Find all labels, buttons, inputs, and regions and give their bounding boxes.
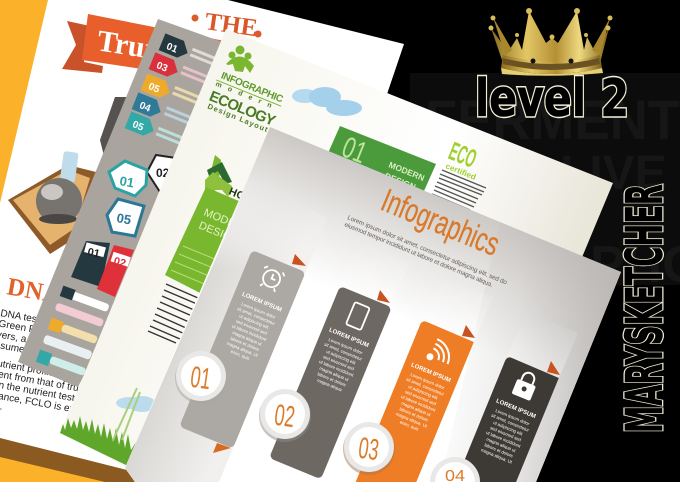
card text: magna aliqua ut (486, 437, 517, 453)
panel: modern design green: DESIGN (197, 220, 241, 247)
sheet 2: grey badges: 04 (138, 100, 152, 115)
faint background words: LIVE (560, 147, 667, 200)
light streak above card 3 (422, 276, 493, 342)
sheet 2: grey badges: 03 (155, 60, 169, 75)
heading: infographics: Infographics (376, 181, 505, 263)
panel: modern design green: MODERN (202, 207, 252, 236)
icon: cloud low (116, 396, 156, 412)
panel: 01 modern design: DESIGN (383, 171, 417, 192)
card text: labore et dolore (399, 406, 429, 423)
heading: the: THE (203, 8, 259, 42)
body text: DNA testi (0, 308, 42, 326)
panel: 01 modern design: 01 (337, 131, 371, 170)
heading: eco certified (444, 136, 481, 182)
badge 01: 01 (188, 361, 213, 396)
card text: magna aliqua ut (319, 366, 350, 382)
ribbon (62, 14, 240, 82)
card text: enim, quis (399, 419, 420, 432)
card 1 (179, 250, 306, 453)
card text: magna aliqua ut (401, 401, 432, 417)
title: level 2: level 2 (475, 69, 629, 129)
icon: wifi (425, 338, 455, 367)
card text: ut adipiscing elit (408, 384, 439, 401)
card text: sit amet, consectetur (236, 306, 276, 326)
badge 01 (175, 351, 227, 404)
light streak above card 2 (340, 241, 411, 304)
heading: eco certified: certified (444, 162, 477, 182)
icon: gold crown (488, 8, 612, 76)
sheet 4: main infographics (125, 127, 621, 482)
card text: labore et dolore (230, 336, 260, 352)
sheet 2: grey badges (18, 19, 250, 387)
card text: sed eiusmod sed (404, 389, 437, 407)
badge 02 (259, 389, 311, 442)
panel: modern design green (165, 187, 260, 294)
light streak above card 4 (507, 312, 578, 378)
card text: enim, quis (230, 349, 251, 361)
vertical brand name (616, 184, 675, 433)
hex badges: 02 (156, 166, 170, 180)
card 3 (356, 276, 493, 482)
option rows (36, 286, 110, 379)
sheet 2: grey badges: 05 (147, 81, 161, 96)
card text: LOREM IPSUM (328, 327, 369, 349)
body text (0, 308, 103, 428)
card text (309, 327, 369, 395)
badge 04 (430, 457, 480, 482)
card text (220, 292, 282, 365)
card text: sit amet, consectetur (491, 413, 530, 433)
card text: magna aliqua (316, 378, 343, 393)
heading: infographic ecology: ECOLOGY (207, 88, 278, 130)
card text: magna aliqua ut (232, 330, 263, 347)
banners 01 and 02: 01 (86, 246, 101, 260)
card text: magna aliqua. Ut (480, 447, 514, 465)
grass (60, 388, 140, 468)
icon: house (205, 155, 268, 211)
hex badges: 05 (115, 210, 132, 227)
card text: ut labore incididunt (485, 430, 522, 449)
card text: sed eiusmod sed (322, 354, 355, 372)
badge rows: 01 (165, 41, 179, 56)
card text: Lorem ipsum dolor (410, 372, 446, 391)
banners 01 and 02 (71, 241, 134, 297)
hex badges (107, 155, 178, 236)
banners 01 and 02: 02 (112, 255, 127, 270)
icon: people (226, 46, 254, 73)
icon: house: HOUSE (227, 186, 268, 211)
card 4 (456, 312, 578, 482)
intro text: Lorem ipsum dolor sit amet, consectetur adipiscing elit, sed do (346, 214, 508, 287)
heading: infographic ecology: modern (214, 81, 273, 110)
card text: Lorem ipsum dolor (328, 337, 364, 356)
card text: sit amet, consectetur (406, 377, 445, 397)
card text (476, 398, 536, 466)
card text: labore et dolore (484, 442, 514, 459)
icon: cloud (292, 87, 362, 116)
badge 03 (343, 422, 395, 475)
card text: magna aliqua. Ut (395, 411, 429, 429)
heading: eco certified: ECO (445, 136, 481, 174)
faint background words (425, 88, 680, 294)
icon: alarm clock (257, 265, 286, 293)
card text: sit amet, consectetur (324, 342, 363, 362)
heading: DNA: DNA (5, 273, 63, 309)
hex badges: 01 (118, 173, 135, 190)
card text: sed eiusmod sed (489, 425, 522, 443)
card text: sed eiusmod sed (235, 319, 268, 336)
card text: magna aliqua. Ut (226, 341, 259, 358)
card text: ut adipiscing elit (326, 349, 357, 366)
badge rows (129, 33, 236, 153)
card text (389, 362, 451, 436)
yellow backdrop (0, 0, 50, 205)
card text: Lorem ipsum dolor (241, 301, 277, 320)
ribbon: Trut (95, 24, 157, 66)
card text: Lorem ipsum dolor (495, 408, 531, 427)
sheet 2: grey badges: 05 (131, 119, 145, 134)
fold band (125, 215, 309, 482)
icon: flask on board (8, 97, 128, 254)
card text: ut adipiscing elit (238, 313, 270, 330)
icon: padlock (511, 369, 540, 401)
badge 02: 02 (272, 399, 297, 434)
text block (432, 170, 486, 210)
card text: LOREM IPSUM (241, 292, 282, 313)
stripes (156, 47, 235, 153)
panel: 01 modern design (325, 126, 436, 200)
heading: infographic ecology: Design Layout (206, 102, 269, 134)
card text: ut labore incididunt (231, 323, 268, 342)
card text: ut adipiscing elit (493, 420, 524, 437)
card 2 (269, 241, 411, 479)
heading: infographic ecology (204, 69, 285, 135)
panel: 01 modern design: MODERN (387, 160, 426, 183)
icon: phone (346, 302, 370, 330)
heading: infographic ecology: INFOGRAPHIC (219, 70, 285, 105)
text block (148, 284, 198, 343)
card text: LOREM IPSUM (410, 362, 451, 384)
card text: ut labore incididunt (318, 359, 355, 378)
sheet 3: ecology (60, 29, 613, 468)
title: level 2: level 2 (475, 69, 629, 129)
card text: LOREM IPSUM (495, 398, 536, 420)
sheet 1: truth poster (0, 0, 404, 482)
badge 03: 03 (356, 432, 381, 467)
card text: labore et dolore (317, 371, 347, 388)
card text: ut labore incididunt (400, 394, 437, 413)
intro text: eiusmod tempor incididunt ut labore et dolore magna aliqua. (343, 221, 494, 289)
